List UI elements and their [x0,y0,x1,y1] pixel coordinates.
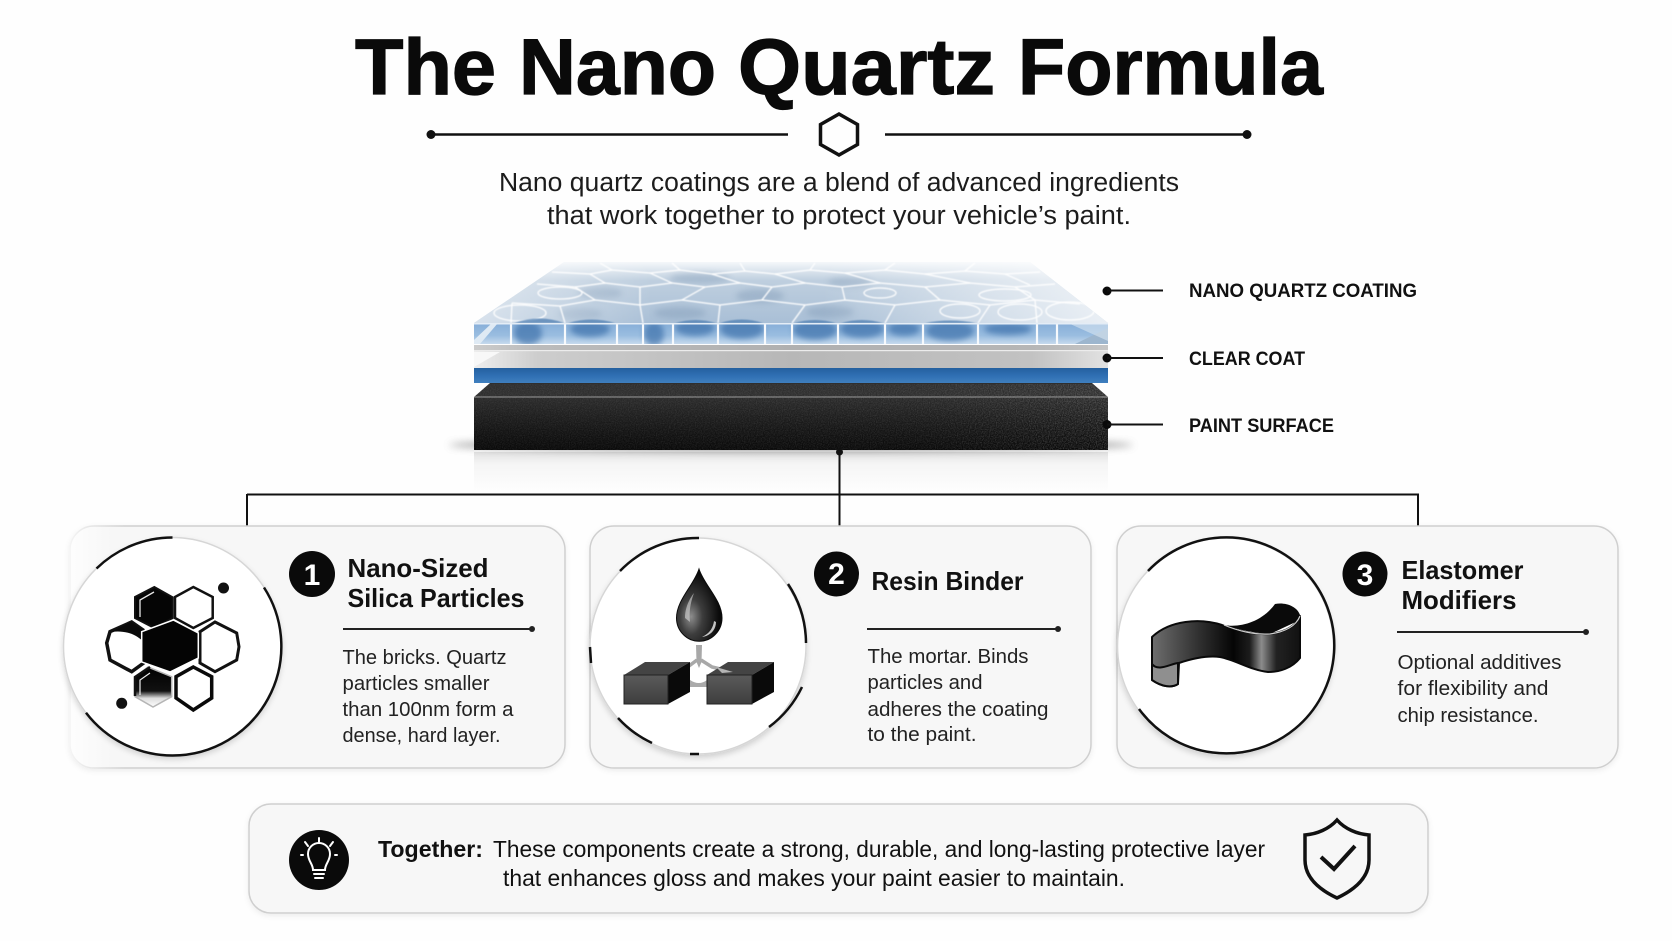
description: to the paint. [868,724,976,746]
subtitle [499,169,1179,230]
description: than 100nm form a [342,699,514,721]
summary text [378,836,1265,891]
title [355,22,1324,111]
title: The [355,22,496,111]
heading: Resin Binder [872,566,1024,596]
panel: nano-sized silica particles [64,526,565,768]
description: for flexibility and [1398,678,1548,700]
heading rule [343,626,535,632]
heading rule [867,626,1061,632]
subtitle: Nano quartz coatings are a blend of advanced ingredients [499,169,1179,197]
callout: nano quartz coating: NANO QUARTZ COATING [1189,281,1417,302]
icon: silica hexagon cluster [64,538,282,756]
panel: elastomer modifiers [1117,526,1618,768]
number badge 3: 3 [1357,559,1373,592]
number badge 2: 2 [828,558,845,591]
layer: clear coat [474,345,1108,368]
number badge 1 [289,551,335,597]
connector tree [247,450,1419,526]
layer: nano quartz coating [474,262,1108,346]
callout: together summary bar [249,804,1428,913]
panel: resin binder [590,526,1091,768]
summary text: These components create a strong, durable, and long-lasting protective layer [493,836,1265,862]
callout: clear coat: CLEAR COAT [1189,349,1305,370]
icon: resin drop bonding two blocks [590,538,806,754]
layer: paint surface [474,383,1108,450]
heading [1402,555,1524,615]
layer callouts [1102,281,1417,437]
title divider with hexagon [426,114,1252,155]
icon: shield with check [1305,820,1369,898]
icon: flexible elastomer ribbon [1118,537,1334,754]
description [342,647,514,747]
description: The bricks. Quartz [342,647,506,669]
heading [348,553,524,613]
callout: paint surface: PAINT SURFACE [1189,416,1334,437]
title: Formula [1018,22,1324,111]
summary text: Together: [378,836,483,862]
description: dense, hard layer. [342,725,500,747]
heading: Silica Particles [348,583,524,613]
subtitle: that work together to protect your vehicle’s paint. [547,202,1131,230]
number badge 3 [1342,552,1388,596]
icon: light bulb [289,830,349,890]
layered coating diagram [449,262,1133,492]
description: particles smaller [342,673,490,695]
description [868,646,1048,746]
description: chip resistance. [1398,705,1538,727]
number badge 1: 1 [304,559,320,592]
layer: blue base [474,368,1108,383]
description: particles and [868,672,982,694]
description: Optional additives [1398,652,1562,674]
summary text: that enhances gloss and makes your paint easier to maintain. [503,865,1125,891]
description: The mortar. Binds [868,646,1028,668]
callout: clear coat [1102,349,1305,370]
description [1398,652,1562,727]
heading: Nano-Sized [348,553,488,583]
title: Nano [519,22,716,111]
title: Quartz [738,22,995,111]
number badge 2 [814,552,859,596]
heading: Elastomer [1402,555,1524,585]
callout: paint surface [1102,416,1334,437]
heading rule [1397,629,1589,635]
heading: Modifiers [1402,585,1516,615]
description: adheres the coating [868,699,1048,721]
reflection and ground shadow [449,439,1133,492]
